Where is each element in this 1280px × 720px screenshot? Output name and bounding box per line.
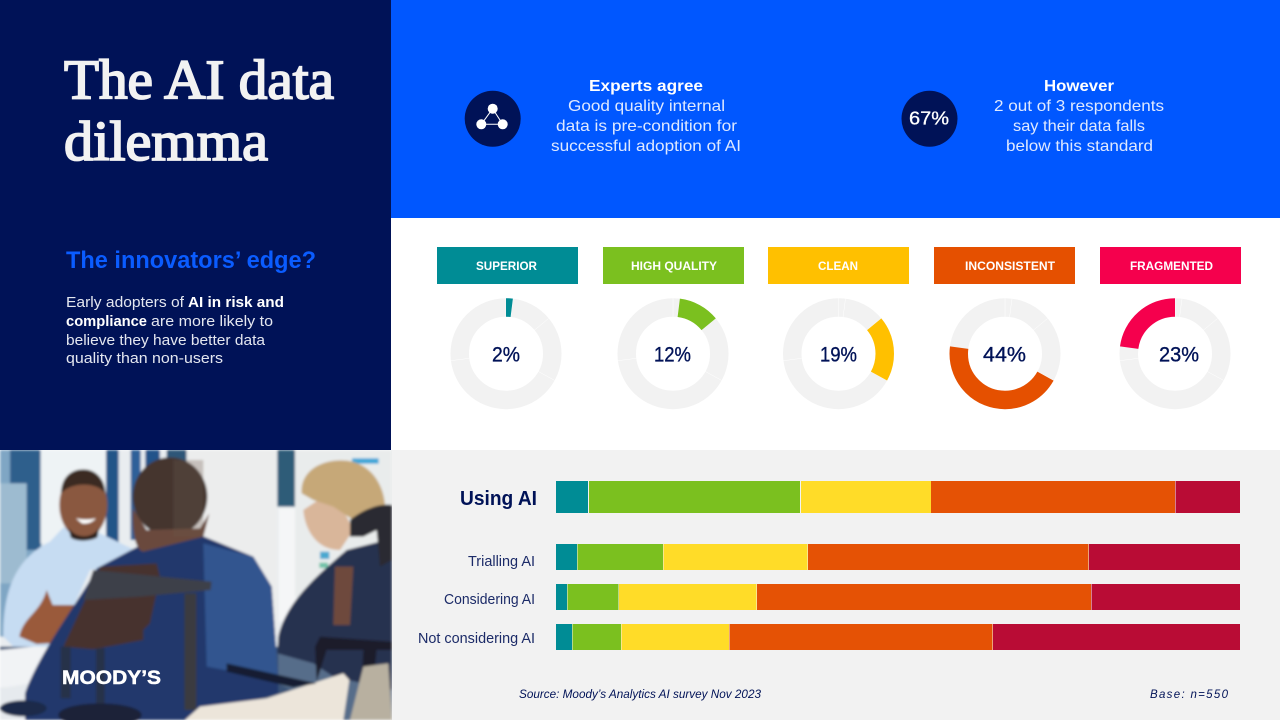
icon: connected nodes — [465, 91, 521, 147]
foreground chair — [185, 673, 349, 720]
text block: however: However — [1044, 78, 1114, 95]
donut: 2%: 2% — [492, 344, 520, 367]
bar: not considering AI: Not considering AI — [418, 630, 535, 647]
panel: office photo illustration — [0, 450, 392, 720]
text block: experts agree: Good quality internal — [568, 98, 725, 115]
text block: early adopters: AI in risk and — [188, 294, 284, 311]
panel: navy title panel — [0, 0, 391, 450]
bar: using AI: Using AI — [460, 488, 537, 510]
icon: 67% badge: 67% — [909, 108, 949, 128]
logo: Moody's wordmark: MOODY’S — [62, 668, 161, 689]
bar: using AI — [460, 481, 1240, 513]
category: clean — [768, 247, 909, 400]
category: superior: SUPERIOR — [476, 259, 537, 273]
text block: experts agree — [551, 78, 741, 155]
donut: 44% — [950, 298, 1054, 400]
man from behind — [25, 535, 278, 720]
bar: trialling AI: Trialling AI — [468, 553, 535, 570]
title: The AI data — [64, 50, 334, 112]
category: fragmented — [1100, 247, 1241, 400]
donut: 19%: 19% — [820, 344, 857, 367]
text block: experts agree: data is pre-condition for — [556, 118, 738, 135]
panel: data quality categories — [437, 247, 1241, 400]
text block: early adopters: Early adopters of — [66, 294, 185, 311]
bar: considering AI — [444, 584, 1240, 610]
category: inconsistent — [934, 247, 1075, 400]
heading: the innovators' edge: The innovators’ edge? — [66, 247, 316, 274]
source note: Source: Moody’s Analytics AI survey Nov 2023 — [519, 689, 762, 701]
text block: however: say their data falls — [1013, 118, 1145, 135]
woman — [277, 542, 392, 690]
donut: 23%: 23% — [1159, 344, 1199, 367]
text block: early adopters: are more likely to — [151, 313, 273, 330]
donut: 23% — [1120, 298, 1224, 400]
text block: however: 2 out of 3 respondents — [994, 98, 1164, 115]
text block: experts agree: successful adoption of AI — [551, 138, 741, 155]
text block: however: below this standard — [1006, 138, 1153, 155]
category: high quality: HIGH QUALITY — [631, 259, 717, 273]
man in blue shirt — [3, 527, 135, 647]
panel: blue key-message banner — [391, 0, 1280, 218]
bar: trialling AI — [468, 544, 1240, 570]
text block: experts agree: Experts agree — [589, 78, 703, 95]
category: clean: CLEAN — [818, 259, 858, 273]
donut: 12% — [618, 298, 722, 400]
title — [64, 50, 334, 173]
text block: however — [994, 78, 1164, 155]
donut: 19% — [783, 298, 887, 400]
bar: not considering AI — [418, 624, 1240, 650]
title: dilemma — [64, 111, 268, 173]
category: inconsistent: INCONSISTENT — [965, 259, 1056, 273]
bar: considering AI: Considering AI — [444, 591, 535, 608]
category: fragmented: FRAGMENTED — [1130, 259, 1213, 273]
donut: 44%: 44% — [983, 344, 1026, 367]
icon: 67% badge — [902, 91, 958, 147]
base note: Base: n=550 — [1150, 689, 1229, 701]
chair and table edge — [63, 563, 160, 649]
text block: early adopters: quality than non-users — [66, 350, 223, 367]
donut: 2% — [451, 298, 555, 400]
category: superior — [437, 247, 578, 400]
donut: 12%: 12% — [654, 344, 691, 367]
text block: early adopters: believe they have better data — [66, 332, 266, 349]
floor and table — [0, 647, 392, 720]
text block: early adopters: compliance — [66, 313, 147, 330]
text block: early adopters — [66, 294, 284, 367]
panel: stacked bar section — [391, 450, 1280, 720]
category: high quality — [603, 247, 744, 400]
